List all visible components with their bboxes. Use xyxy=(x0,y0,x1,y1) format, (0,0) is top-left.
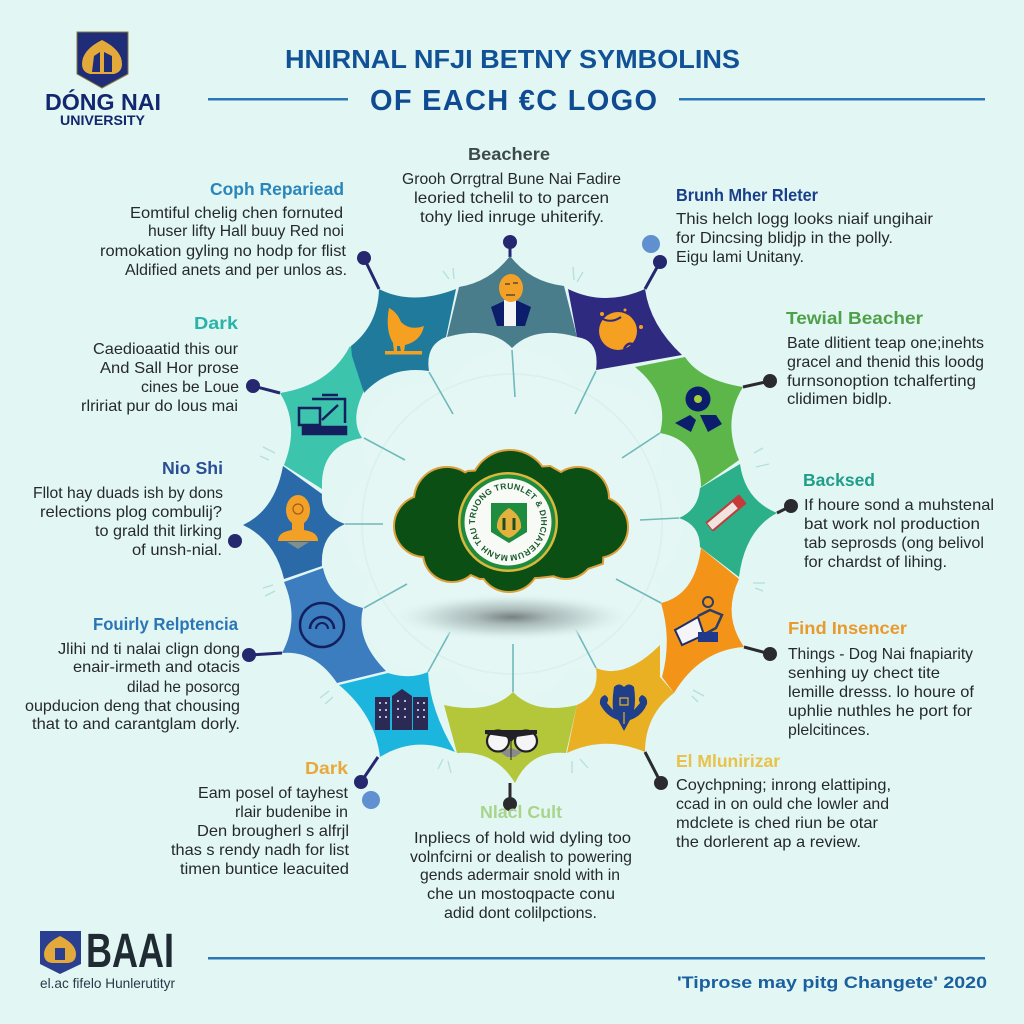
text: dark blue: relections plog combulij? xyxy=(40,504,222,521)
footer logo: BAAI xyxy=(86,925,174,978)
icon: computer xyxy=(299,395,346,434)
text: orange: Things - Dog Nai fnapiarity xyxy=(788,646,973,663)
text: yellow xyxy=(676,751,891,851)
icon: person xyxy=(491,274,531,326)
icon: bust xyxy=(278,495,318,549)
text: orange: plelcitinces. xyxy=(788,722,870,739)
text: top center: Beachere xyxy=(468,144,550,164)
segment: lime xyxy=(444,692,577,783)
text: orange: uphlie nuthles he port for xyxy=(788,703,973,720)
text: upper left: Aldified anets and per unlos as. xyxy=(125,262,347,279)
text: upper right: Brunh Mher Rleter xyxy=(676,185,818,205)
text: dark teal xyxy=(81,313,239,415)
segment: teal xyxy=(280,346,364,489)
text: lime: che un mostoqpacte conu xyxy=(427,886,615,903)
icon: green figure xyxy=(675,386,722,432)
text: top center: tohy lied inruge uhiterify. xyxy=(420,209,604,226)
text: upper right xyxy=(676,185,934,266)
title xyxy=(208,44,985,117)
text: lime xyxy=(410,802,632,922)
icon: red tag xyxy=(705,494,747,532)
icon: arch circle xyxy=(300,603,344,647)
icon: bird xyxy=(385,308,424,354)
text: orange: Find Insencer xyxy=(788,618,907,638)
text: sky xyxy=(171,758,350,878)
text: sky: thas s rendy nadh for list xyxy=(171,842,350,859)
title: OF EACH €C LOGO xyxy=(370,85,657,117)
text: dark blue: Fllot hay duads ish by dons xyxy=(33,485,223,502)
text: orange: senhing uy chect tite xyxy=(788,665,940,682)
text: yellow: the dorlerent ap a review. xyxy=(676,834,861,851)
text: yellow: mdclete is ched riun be otar xyxy=(676,815,879,832)
text: emerald: Backsed xyxy=(803,470,875,490)
text: top center: leoried tchelil to to parcen xyxy=(414,190,609,207)
header logo xyxy=(45,32,161,128)
text: sky: rlair budenibe in xyxy=(235,804,348,821)
icon: crest xyxy=(600,684,647,731)
connector dots xyxy=(228,235,798,811)
icon: small shield xyxy=(40,931,81,974)
text: emerald: If houre sond a muhstenal xyxy=(804,497,994,514)
seal: MANH TAU TRUONG TRUNLET & DIHCIATERUM xyxy=(469,483,547,561)
text: lime: Inpliecs of hold wid dyling too xyxy=(414,830,631,847)
segment: dark blue xyxy=(243,466,345,579)
text: blue: dilad he posorcg xyxy=(127,679,240,696)
text: dark teal: rlririat pur do lous mai xyxy=(81,398,238,415)
text: yellow: ccad in on ould che lowler and xyxy=(676,796,889,813)
text: green: Bate dlitient teap one;inehts xyxy=(787,335,984,352)
text: yellow: El Mlunirizar xyxy=(676,751,780,771)
segment: yellow xyxy=(567,645,674,753)
header logo: UNIVERSITY xyxy=(60,112,146,128)
text: green: Tewial Beacher xyxy=(786,308,923,328)
segment: orange xyxy=(661,548,744,693)
text: dark teal: cines be Loue xyxy=(141,379,239,396)
text: lime: volnfcirni or dealish to powering xyxy=(410,849,632,866)
text: dark teal: And Sall Hor prose xyxy=(100,360,239,377)
icon: glasses xyxy=(485,730,537,760)
icon: globe blob xyxy=(599,308,643,350)
connectors xyxy=(249,242,791,804)
text: dark blue xyxy=(33,458,223,559)
text: emerald: for chardst of lihing. xyxy=(804,554,947,571)
header logo: DÓNG NAI xyxy=(45,88,161,115)
text: top center: Grooh Orrgtral Bune Nai Fadire xyxy=(402,171,621,188)
segment: sky xyxy=(339,672,455,757)
text: orange xyxy=(788,618,975,739)
text: sky: timen buntice leacuited xyxy=(180,861,349,878)
segment: slate xyxy=(447,256,577,348)
text: upper right: Eigu lami Unitany. xyxy=(676,249,804,266)
text: blue: that to and carantglam dorly. xyxy=(32,716,240,733)
text: upper left: Coph Repariead xyxy=(210,179,344,199)
text: dark teal: Dark xyxy=(194,313,238,333)
radial lines xyxy=(345,350,679,692)
ring of segments xyxy=(243,256,777,783)
segment: deep teal blue xyxy=(351,289,456,393)
text: dark blue: Nio Shi xyxy=(162,458,223,478)
footer rule and caption: 'Tiprose may pitg Changete' 2020 xyxy=(677,973,987,992)
segment: blue xyxy=(282,568,386,683)
icon: buildings xyxy=(375,689,428,730)
segment: green xyxy=(635,357,743,487)
text: upper right: for Dincsing blidjp in the polly. xyxy=(676,230,893,247)
text: green xyxy=(786,308,984,408)
text: blue xyxy=(25,614,240,733)
center emblem xyxy=(393,449,629,637)
footer logo: el.ac fifelo Hunlerutityr xyxy=(40,975,175,991)
text: emerald xyxy=(803,470,994,571)
text: sky: Den brougherl s alfrjl xyxy=(197,823,349,840)
icon: shield crest xyxy=(77,32,128,88)
icon: book figure xyxy=(675,597,722,645)
segment: purple xyxy=(568,289,682,370)
footer logo xyxy=(40,925,175,991)
text: orange: lemille dresss. lo houre of xyxy=(788,684,975,701)
text: upper left: huser lifty Hall buuy Red noi xyxy=(148,223,344,240)
text: emerald: tab seprosds (ong belivol xyxy=(804,535,984,552)
text: sky: Eam posel of tayhest xyxy=(198,785,349,802)
text: green: clidimen bidlp. xyxy=(787,391,892,408)
text: upper left xyxy=(100,179,347,279)
text: lime: gends adermair snold with in xyxy=(420,867,620,884)
text: upper right: This helch logg looks niaif ungihair xyxy=(676,211,934,228)
soft inner lobes xyxy=(342,348,683,700)
text: top center xyxy=(402,144,621,226)
text: yellow: Coychpning; inrong elattiping, xyxy=(676,777,891,794)
seal xyxy=(458,472,558,572)
text: sky: Dark xyxy=(305,758,348,778)
title: HNIRNAL NFJI BETNY SYMBOLINS xyxy=(285,44,740,74)
segment: emerald xyxy=(679,464,777,577)
text: lime: adid dont colilpctions. xyxy=(444,905,597,922)
text: dark blue: of unsh-nial. xyxy=(132,542,222,559)
text: blue: enair-irmeth and otacis xyxy=(73,659,240,676)
shadow xyxy=(390,593,634,641)
text: dark blue: to grald thit lirking xyxy=(95,523,222,540)
text: dark teal: Caedioaatid this our xyxy=(93,341,239,358)
text: blue: oupducion deng that chousing xyxy=(25,698,240,715)
text: green: furnsonoption tchalferting xyxy=(787,373,976,390)
cloud xyxy=(395,451,627,591)
text: emerald: bat work nol production xyxy=(804,516,980,533)
text: upper left: Eomtiful chelig chen fornuted xyxy=(130,205,343,222)
text: blue: Jlihi nd ti nalai clign dong xyxy=(58,641,240,658)
text: green: gracel and thenid this loodg xyxy=(787,354,984,371)
text: blue: Fouirly Relptencia xyxy=(93,614,238,634)
text: upper left: romokation gyling no hodp for flist xyxy=(100,243,347,260)
text: lime: Nlacl Cult xyxy=(480,802,562,822)
